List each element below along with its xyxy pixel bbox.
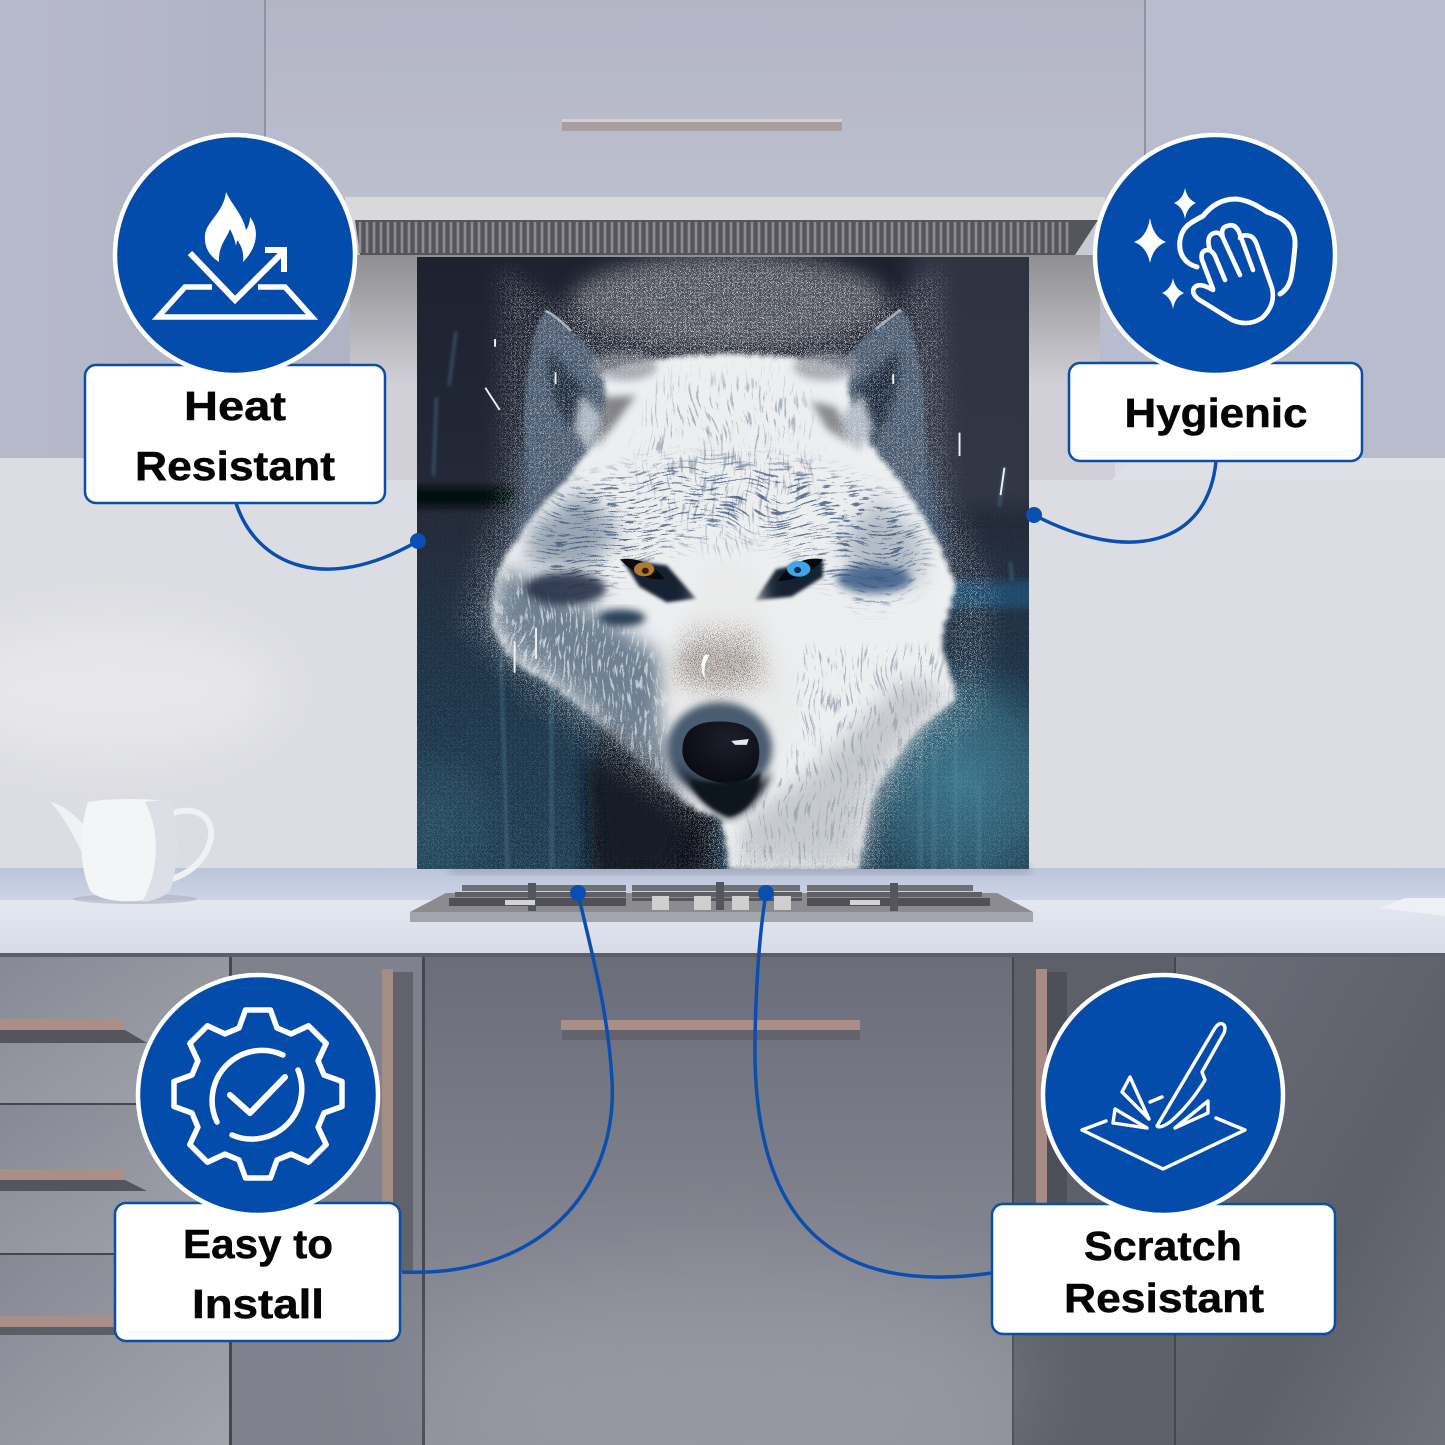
left cheek shadow (491, 565, 682, 800)
wolf glass splashback artwork (417, 257, 1029, 869)
label text: Hygienic (1124, 390, 1308, 436)
label text: Heat (184, 383, 286, 429)
upper cabinets (0, 0, 1445, 458)
cooktop (410, 882, 1033, 922)
art backdrop (417, 257, 1029, 869)
right ear (828, 310, 952, 569)
wall shelves (0, 458, 1445, 480)
speckled halo around head (417, 257, 1029, 869)
label text: Scratch (1084, 1223, 1242, 1269)
connector: heat resistant (236, 503, 426, 569)
upper cabinet handle (562, 119, 842, 131)
fur texture (479, 368, 951, 869)
badge: heat resistant: Resistant (135, 443, 335, 489)
badge: scratch resistant (992, 975, 1335, 1334)
back wall (0, 440, 1445, 880)
connector: easy to install (402, 885, 612, 1272)
side fur shading (526, 491, 620, 569)
left ear (507, 311, 620, 561)
circle (1095, 135, 1335, 375)
nose (667, 702, 772, 819)
label box (992, 1204, 1335, 1334)
lower cabinets (0, 953, 1445, 1445)
icon: hand wiping with sparkles (1134, 188, 1295, 323)
head and mane (491, 354, 956, 869)
label box (115, 1203, 400, 1341)
countertop (0, 868, 1445, 953)
label text: Easy to (183, 1221, 333, 1267)
panel shadow (450, 864, 1030, 874)
dark eye markings (524, 559, 911, 627)
circle (115, 135, 355, 375)
connector: scratch resistant (755, 885, 992, 1277)
white paint spatter (485, 339, 1004, 684)
label box (1069, 363, 1362, 461)
badge: easy to install: Install (192, 1281, 324, 1327)
label box (85, 365, 385, 503)
badge: easy to install (115, 975, 400, 1341)
badge: scratch resistant: Resistant (1064, 1275, 1264, 1321)
wolf eyes (620, 559, 823, 581)
snow burst above head (417, 253, 1029, 869)
teapot (50, 799, 211, 904)
icon: gear with check mark (174, 1010, 342, 1178)
paint drips (433, 331, 1012, 869)
badge: hygienic (1069, 135, 1362, 461)
circle (138, 975, 378, 1215)
extractor hood (345, 197, 1105, 255)
muzzle (646, 576, 800, 786)
ear base shading (573, 352, 874, 452)
circle (1043, 975, 1283, 1215)
cabinet handles (0, 969, 1067, 1335)
icon: knife scratching surface (1082, 1024, 1245, 1169)
badge: heat resistant (85, 135, 385, 503)
icon: flame over surface with deflect arrow (158, 192, 312, 317)
connector: hygienic (1026, 461, 1216, 542)
